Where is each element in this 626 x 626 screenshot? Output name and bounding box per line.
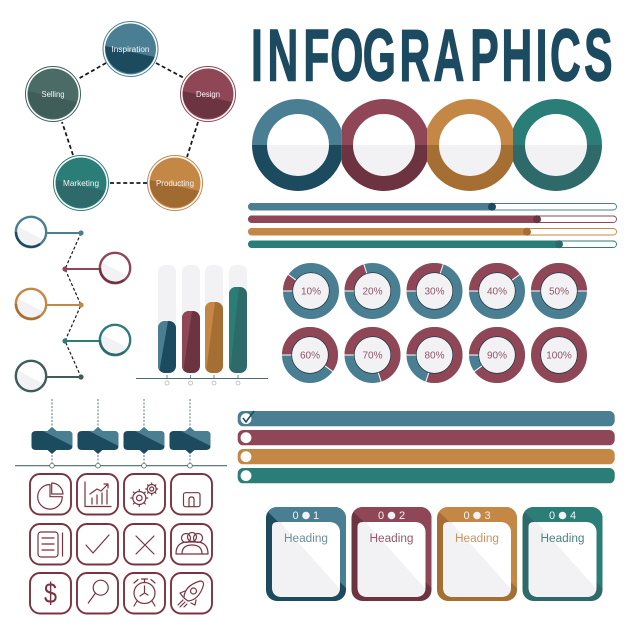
- bar: red: [182, 311, 200, 373]
- card 01: [266, 507, 346, 601]
- heading cards: [266, 507, 602, 601]
- node: Producting: [148, 156, 202, 210]
- progress bar: red: [248, 215, 616, 223]
- donut 100%: 100%: [546, 351, 572, 362]
- donut 80%: 80%: [424, 351, 445, 362]
- donut 80%: [406, 332, 458, 382]
- donut 90%: [468, 332, 520, 378]
- icon: cross: [124, 524, 165, 564]
- card 02: Heading: [370, 533, 414, 545]
- timeline node 1: [15, 217, 84, 248]
- icon: pie chart: [30, 474, 71, 514]
- card 04: [522, 507, 602, 601]
- tag 2: [78, 427, 118, 454]
- donut 40%: [468, 268, 520, 314]
- node: Marketing: Marketing: [63, 179, 99, 188]
- icon: people group: [171, 524, 212, 564]
- icon: dollar: $: [44, 578, 57, 610]
- node: Selling: [26, 66, 80, 122]
- donut 20%: 20%: [362, 287, 383, 298]
- ring: orange: [432, 106, 508, 183]
- bar: orange: [205, 302, 223, 373]
- donut 90%: 90%: [487, 351, 507, 362]
- node: Inspiration: [103, 22, 158, 76]
- card 02: 2: [399, 510, 405, 522]
- icon: rocket: [171, 573, 212, 614]
- card 01: 1: [313, 510, 319, 522]
- checklist bar: orange: [238, 449, 615, 464]
- icon: home square: [171, 474, 212, 514]
- timeline node 2: [62, 253, 130, 284]
- donut 10%: [282, 268, 334, 314]
- bar tracks: [158, 265, 247, 373]
- icon: dollar: [30, 573, 71, 614]
- node: Design: Design: [196, 90, 220, 99]
- icon: alarm clock: [124, 573, 165, 614]
- tag 3: [124, 427, 164, 454]
- card 01: Heading: [284, 533, 328, 545]
- donut 70%: 70%: [362, 351, 383, 362]
- checklist bars: [238, 411, 615, 483]
- checklist bar: blue, checked: [238, 411, 615, 426]
- chart axis: [136, 375, 268, 385]
- icon: magnifier: [77, 573, 118, 614]
- progress bar: teal: [248, 240, 616, 248]
- card 04: 0: [549, 510, 555, 522]
- donut 50%: [530, 268, 588, 314]
- large ring row: [260, 106, 594, 183]
- ring: teal: [518, 106, 594, 183]
- donut 60%: 60%: [300, 351, 320, 362]
- hanging tags: [15, 399, 227, 468]
- card 04: 4: [570, 510, 576, 522]
- progress bar: blue: [248, 203, 616, 211]
- icon: check mark: [77, 524, 118, 564]
- icon: document: [30, 524, 71, 564]
- percentage donuts: [282, 264, 588, 382]
- donut 30%: 30%: [424, 287, 445, 298]
- card 02: 0: [378, 510, 384, 522]
- process cycle diagram: [26, 22, 236, 210]
- card 03: Heading: [455, 533, 499, 545]
- zigzag timeline: [15, 217, 130, 392]
- dashed hangers: [52, 399, 190, 463]
- card 03: 3: [484, 510, 491, 522]
- progress bar: orange: [248, 228, 616, 236]
- tag 1: [32, 427, 72, 454]
- donut 20%: [344, 264, 396, 314]
- card 03: [437, 507, 517, 601]
- icon grid: [30, 474, 212, 614]
- node: Marketing: [54, 156, 108, 210]
- dashed zigzag path: [65, 233, 81, 377]
- progress bars: [248, 203, 616, 248]
- bar: teal: [229, 287, 247, 373]
- icon: gears: [124, 474, 165, 514]
- card 04: Heading: [540, 533, 584, 545]
- bar chart: [136, 265, 268, 385]
- donut 40%: 40%: [487, 287, 507, 298]
- ring: blue: [260, 106, 336, 183]
- checklist bar: teal: [238, 468, 615, 483]
- donut 30%: [406, 264, 458, 314]
- node: Selling: Selling: [42, 90, 64, 99]
- bar: blue: [158, 321, 176, 373]
- card 01: 0: [292, 510, 299, 522]
- tag baseline: [15, 463, 227, 468]
- checklist bar: red: [238, 430, 615, 445]
- node: Producting: Producting: [156, 179, 194, 188]
- ring: red: [346, 106, 422, 183]
- icon: growth chart: [77, 474, 118, 514]
- node: Design: [180, 66, 236, 122]
- title: INFOGRAPHICS: [251, 14, 613, 96]
- tag 4: [170, 427, 210, 454]
- timeline node 4: [62, 325, 130, 356]
- dashed connectors: [62, 63, 198, 183]
- timeline node 3: [15, 289, 84, 320]
- donut 10%: 10%: [301, 287, 321, 298]
- card 02: [352, 507, 432, 601]
- card 03: 0: [463, 510, 470, 522]
- node: Inspiration: Inspiration: [112, 45, 150, 54]
- donut 70%: [344, 332, 396, 382]
- timeline node 5: [15, 361, 84, 392]
- donut 100%: [536, 332, 582, 378]
- donut 50%: 50%: [549, 287, 569, 298]
- donut 60%: [282, 332, 333, 378]
